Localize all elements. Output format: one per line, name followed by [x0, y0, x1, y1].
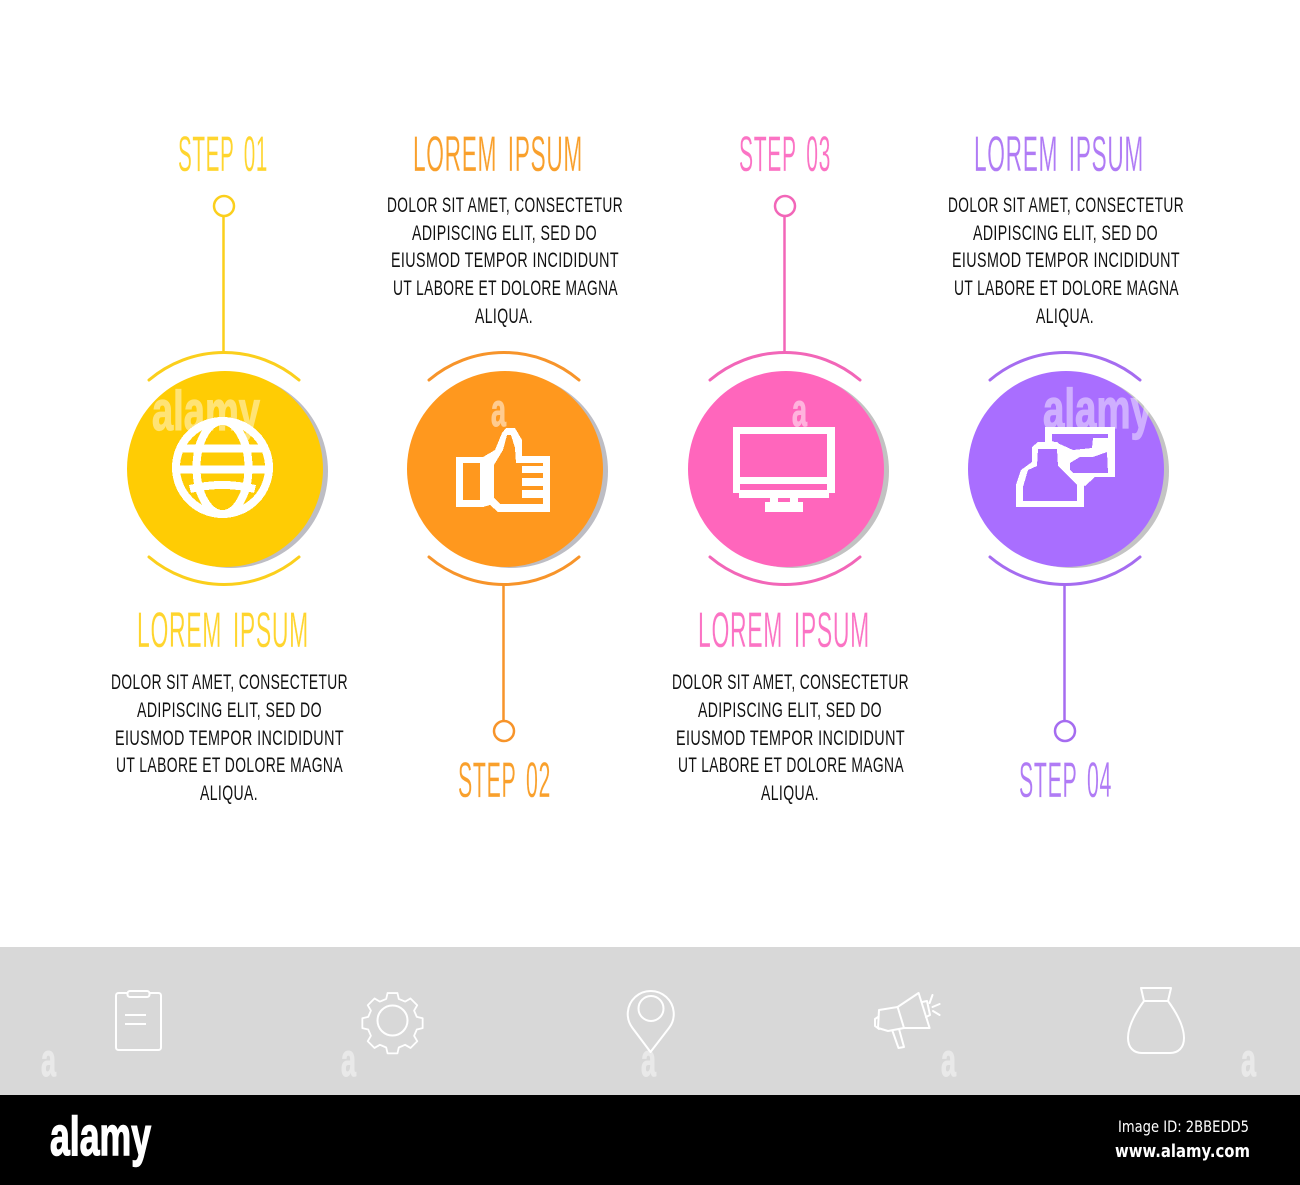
watermark: a: [792, 384, 807, 436]
watermark letters: a: [941, 1034, 956, 1086]
pink circle: [688, 371, 884, 567]
description text: EIUSMOD TEMPOR INCIDIDUNT: [391, 248, 619, 272]
description text: [111, 670, 348, 805]
description text: [948, 193, 1184, 328]
panel: step 04: STEP 04: [1019, 752, 1112, 808]
description text: DOLOR SIT AMET, CONSECTETUR: [111, 670, 348, 694]
watermark letters: a: [341, 1034, 356, 1086]
description text: DOLOR SIT AMET, CONSECTETUR: [672, 670, 909, 694]
description text: ALIQUA.: [1036, 304, 1094, 328]
circle shadow: [134, 374, 328, 568]
description text: ADIPISCING ELIT, SED DO: [137, 698, 322, 722]
icon: globe: [176, 421, 270, 514]
watermark letters: a: [1241, 1034, 1256, 1086]
description text: EIUSMOD TEMPOR INCIDIDUNT: [115, 726, 344, 750]
icon: money bag: [1128, 988, 1184, 1053]
description text: EIUSMOD TEMPOR INCIDIDUNT: [952, 248, 1180, 272]
watermark letters: [41, 1034, 1256, 1086]
connector line with node: [1055, 585, 1075, 741]
website url: www.alamy.com: [1115, 1141, 1250, 1162]
description text: UT LABORE ET DOLORE MAGNA: [116, 753, 343, 777]
connector line with node: [775, 196, 795, 354]
watermark letters: a: [641, 1034, 656, 1086]
watermark: a: [491, 384, 506, 436]
icon: clipboard: [116, 991, 161, 1050]
description text: UT LABORE ET DOLORE MAGNA: [678, 753, 904, 777]
panel: step 02: LOREM IPSUM: [413, 126, 583, 182]
yellow circle: [127, 371, 323, 567]
description text: EIUSMOD TEMPOR INCIDIDUNT: [676, 726, 905, 750]
description text: ADIPISCING ELIT, SED DO: [412, 221, 597, 245]
logo: alamy: alamy: [50, 1105, 151, 1167]
description text: DOLOR SIT AMET, CONSECTETUR: [387, 193, 623, 217]
panel: step 04: [948, 126, 1184, 808]
icon: monitor: [733, 427, 835, 512]
panel: black footer bar: [0, 1095, 1300, 1185]
description text: ALIQUA.: [761, 781, 819, 805]
purple circle: [968, 371, 1164, 567]
arc brackets: [149, 352, 299, 585]
circle shadow: [695, 374, 889, 568]
panel: step 02: [387, 126, 623, 808]
image id: Image ID: 2BBEDD5: [1118, 1117, 1249, 1136]
watermark: alamy: [152, 379, 260, 442]
watermark: alamy: [1043, 377, 1152, 440]
icon: thumbs up: [456, 428, 550, 512]
panel: step 03: STEP 03: [739, 126, 831, 182]
icon: map pin: [628, 991, 674, 1052]
circle shadow: [975, 374, 1169, 568]
connector line with node: [494, 585, 514, 741]
panel: step 03: [672, 126, 909, 805]
circle shadow: [414, 374, 608, 568]
description text: [672, 670, 909, 805]
panel: step 01: LOREM IPSUM: [137, 602, 309, 658]
connector line with node: [214, 196, 234, 354]
description text: [387, 193, 623, 328]
footer background: [0, 1095, 1300, 1185]
description text: ALIQUA.: [475, 304, 533, 328]
icon: gear: [362, 993, 423, 1053]
panel: step 02: STEP 02: [458, 752, 551, 808]
panel: grey icon band: [0, 947, 1300, 1095]
description text: ALIQUA.: [200, 781, 258, 805]
description text: ADIPISCING ELIT, SED DO: [973, 221, 1158, 245]
description text: ADIPISCING ELIT, SED DO: [698, 698, 882, 722]
panel: step 01: STEP 01: [178, 126, 268, 182]
icon: megaphone: [875, 993, 940, 1048]
watermark letters: a: [41, 1034, 56, 1086]
band background: [0, 947, 1300, 1095]
arc brackets: [429, 352, 579, 585]
panel: step 03: LOREM IPSUM: [698, 602, 870, 658]
arc brackets: [710, 352, 860, 585]
arc brackets: [990, 352, 1140, 585]
description text: UT LABORE ET DOLORE MAGNA: [954, 276, 1179, 300]
icon: person with message card: [1016, 427, 1115, 507]
panel: step 01: [111, 126, 348, 805]
orange circle: [407, 371, 603, 567]
description text: UT LABORE ET DOLORE MAGNA: [393, 276, 618, 300]
